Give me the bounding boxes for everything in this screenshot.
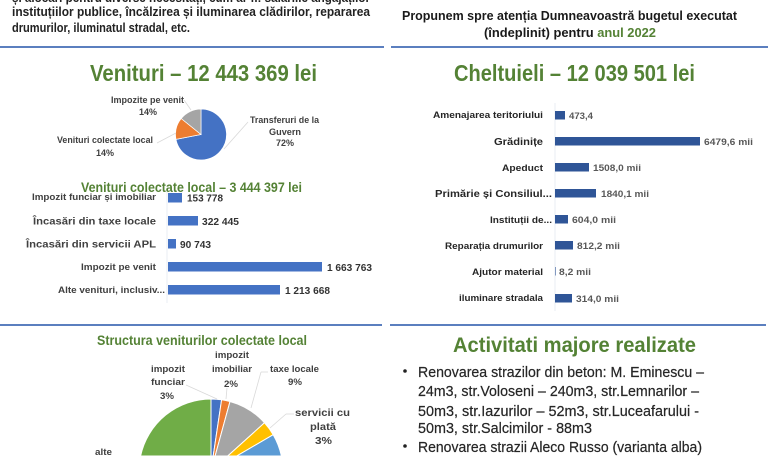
- pie label: impozite pe venit: Impozite pe venit: [111, 95, 184, 105]
- bar: gradinite: 6479,6 mii: [704, 137, 753, 148]
- budget intro heading: [402, 8, 738, 40]
- bar: institutii: [490, 215, 616, 226]
- bar: institutii: 604,0 mii: [572, 215, 616, 226]
- pie label: transferuri: 72%: [276, 138, 294, 148]
- bar: iluminare stradala: 314,0 mii: [576, 294, 619, 305]
- bar: taxe locale: [32, 214, 239, 228]
- pie label: impozit funciar: [151, 364, 186, 401]
- list: activitati: 24m3, str.Voloseni – 240m3, str.Lemnarilor –: [418, 384, 700, 400]
- bar: impozit funciar: Impozit funciar și imobiliar: [32, 192, 156, 203]
- heading: cheltuieli: Cheltuieli – 12 039 501 lei: [454, 60, 695, 86]
- list: activitati: Renovarea strazii Aleco Russo (varianta alba): [418, 440, 702, 456]
- bar: impozit funciar: 153 778: [187, 192, 223, 204]
- pie label: taxe locale: [270, 364, 319, 387]
- pie label: venituri colectate local: 14%: [96, 148, 114, 158]
- bar: ajutor material: Ajutor material: [472, 267, 543, 278]
- bar: institutii: Instituții de...: [490, 215, 552, 226]
- heading: venituri: Venituri – 12 443 369 lei: [90, 60, 317, 86]
- bar: impozit pe venit: Impozit pe venit: [81, 262, 157, 273]
- bar: ajutor material: 8,2 mii: [559, 267, 591, 278]
- bar: alte venituri: Alte venituri, inclusiv...: [58, 285, 165, 296]
- bar: iluminare stradala: iluminare stradala: [459, 293, 544, 304]
- heading: venituri colectate local: Venituri colectate local – 3 444 397 lei: [81, 180, 302, 195]
- pie label: transferuri: [250, 115, 320, 148]
- bar: reparatia drumurilor: 812,2 mii: [577, 241, 620, 252]
- bar: apeduct: 1508,0 mii: [593, 163, 641, 174]
- bar: iluminare stradala: [459, 293, 619, 305]
- pie label: servicii cu plata: plată: [310, 421, 336, 433]
- budget intro heading: Propunem spre atenția Dumneavoastră bugetul executat: [402, 8, 738, 23]
- pie label: impozit imobiliar: 2%: [224, 379, 238, 389]
- pie label: transferuri: Transferuri de la: [250, 115, 320, 125]
- intro text block: [12, 0, 371, 35]
- pie label: impozite pe venit: 14%: [139, 107, 157, 117]
- bar: amenajarea teritoriului: 473,4: [569, 111, 594, 122]
- pie label: impozit funciar: 3%: [160, 391, 174, 401]
- bar: impozit pe venit: 1 663 763: [327, 262, 372, 274]
- bar: servicii APL: 90 743: [180, 239, 211, 251]
- pie label: transferuri: Guvern: [269, 127, 301, 137]
- bar: alte venituri: [58, 285, 330, 297]
- pie label: servicii cu plata: 3%: [315, 435, 333, 447]
- bar: gradinite: [494, 136, 753, 148]
- bar chart: venituri colectate local: [25, 190, 372, 303]
- list: activitati: Renovarea strazilor din beton: M. Eminescu –: [418, 365, 705, 381]
- bar: amenajarea teritoriului: Amenajarea teritoriului: [433, 110, 543, 121]
- pie label: impozit funciar: funciar: [151, 377, 186, 387]
- intro text block: instituțiilor publice, încălzirea și iluminarea clădirilor, repararea: [12, 4, 371, 19]
- bar: amenajarea teritoriului: [433, 110, 594, 122]
- pie label: venituri colectate local: [57, 135, 153, 158]
- list: activitati: 50m3, str.Salcimilor - 88m3: [418, 421, 592, 437]
- bar: servicii APL: [25, 238, 211, 251]
- bar: taxe locale: 322 445: [202, 216, 239, 228]
- bar: servicii APL: Încasări din servicii APL: [25, 238, 157, 250]
- bar: primarie: 1840,1 mii: [601, 189, 649, 200]
- pie label: taxe locale: taxe locale: [270, 364, 319, 374]
- bar: gradinite: Grădinițe: [494, 136, 543, 148]
- pie label: venituri colectate local: Venituri colectate local: [57, 135, 153, 145]
- pie label: impozit imobiliar: [212, 350, 253, 389]
- pie label: servicii cu plata: servicii cu: [295, 407, 350, 419]
- bar chart: cheltuieli: [433, 103, 753, 311]
- list: activitati: [403, 365, 705, 456]
- heading: activitati majore: Activitati majore realizate: [453, 334, 696, 357]
- pie label: taxe locale: 9%: [288, 377, 302, 387]
- pie label: impozite pe venit: [111, 95, 184, 117]
- bar: apeduct: Apeduct: [502, 163, 544, 174]
- pie label: servicii cu plata: [295, 407, 350, 447]
- pie chart: venituri: [57, 95, 320, 160]
- list: activitati: 50m3, str.Iazurilor – 52m3, str.Luceafarului -: [418, 404, 699, 420]
- pie label: impozit funciar: impozit: [151, 364, 185, 374]
- bar: ajutor material: [472, 267, 591, 278]
- bar: reparatia drumurilor: [445, 241, 620, 252]
- intro text block: drumurilor, iluminatul stradal, etc.: [12, 20, 190, 35]
- pie label: impozit imobiliar: imobiliar: [212, 364, 253, 374]
- bar: impozit pe venit: [81, 262, 372, 274]
- bar: alte venituri: 1 213 668: [285, 285, 330, 297]
- pie chart: structura: [95, 350, 350, 456]
- heading: structura veniturilor: Structura veniturilor colectate local: [97, 333, 307, 348]
- pie label: impozit imobiliar: impozit: [215, 350, 249, 360]
- budget intro heading: (îndeplinit) pentru anul 2022: [484, 25, 656, 40]
- bar: primarie: [435, 188, 649, 200]
- bar: taxe locale: Încasări din taxe locale: [32, 214, 156, 228]
- bar: primarie: Primărie și Consiliul...: [435, 188, 552, 200]
- bar: apeduct: [502, 163, 641, 174]
- bar: impozit funciar: [32, 192, 223, 204]
- bar: reparatia drumurilor: Reparația drumurilor: [445, 241, 543, 252]
